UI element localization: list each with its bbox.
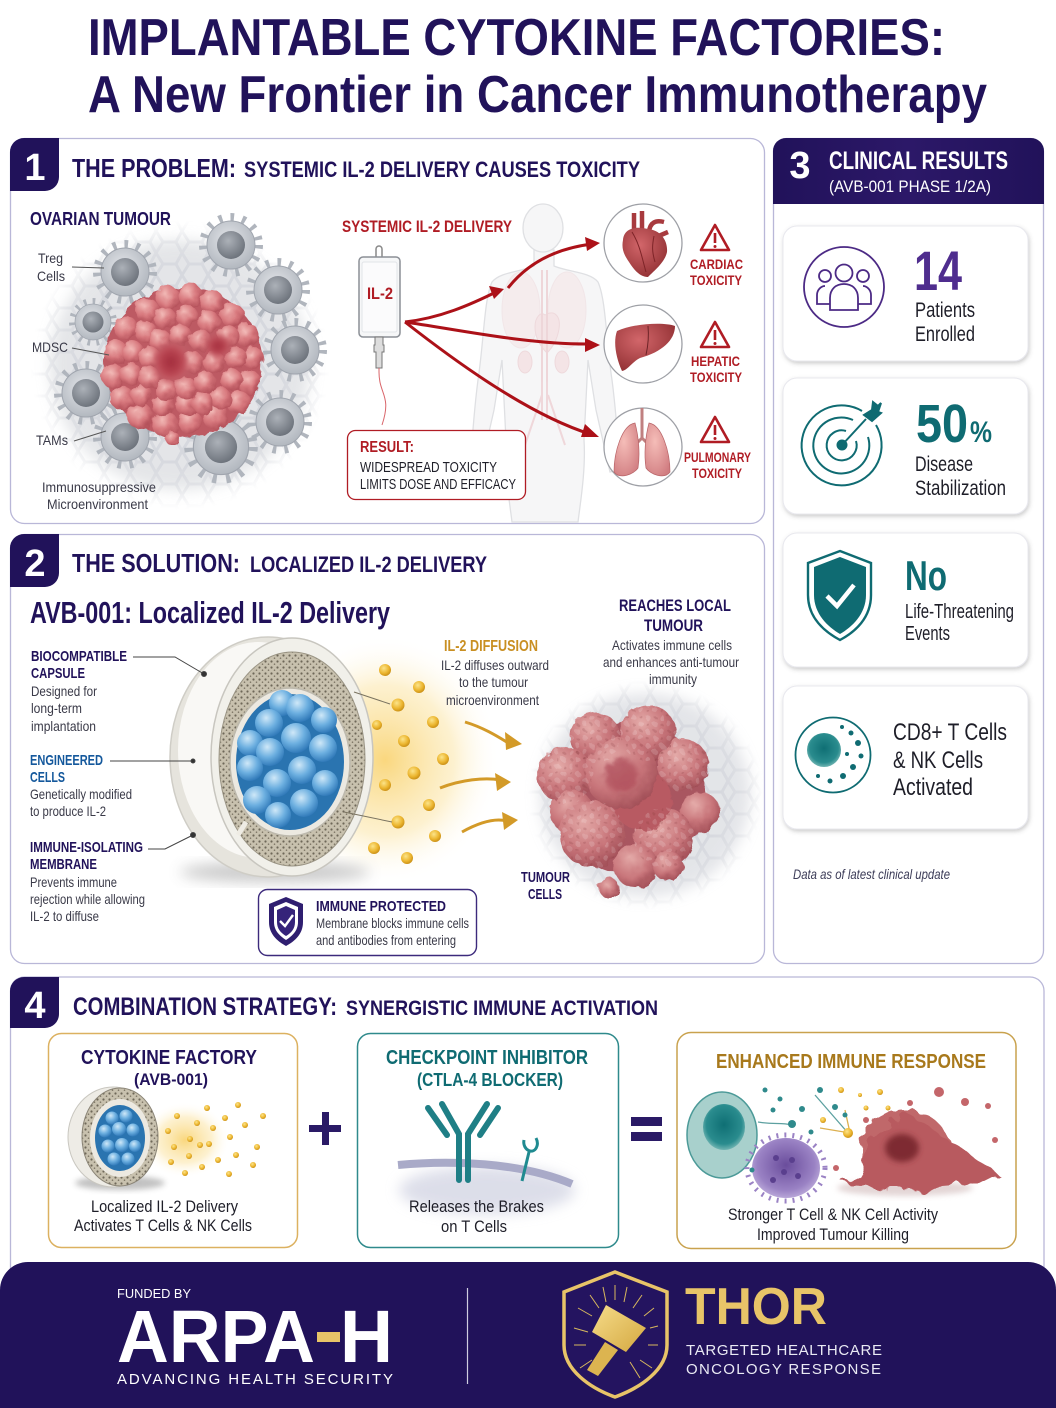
capsule callouts: CAPSULE [31, 665, 85, 682]
purple NK cell [747, 1135, 825, 1201]
THOR wordmark: TARGETED HEALTHCARE [686, 1342, 882, 1359]
result callout: LIMITS DOSE AND EFFICACY [360, 477, 516, 493]
icon: IV bag: IL-2 [367, 284, 393, 303]
heading: combination: COMBINATION STRATEGY: [73, 993, 337, 1021]
card: no life-threatening events: No [905, 552, 947, 599]
box: cytokine factory: (AVB-001) [134, 1070, 208, 1089]
reaches tumour text: TUMOUR [644, 616, 703, 635]
diffusion text: IL-2 DIFFUSION [444, 638, 538, 655]
toxicity warnings: HEPATIC [691, 353, 740, 369]
human body silhouette [470, 204, 620, 522]
reaches tumour text: Activates immune cells [612, 637, 732, 653]
badge 2 [10, 534, 59, 587]
immune protected callout: Membrane blocks immune cells [316, 915, 469, 931]
capsule callouts: MEMBRANE [30, 856, 97, 873]
tumour cells label: TUMOUR [521, 869, 570, 886]
heading: the problem: SYSTEMIC IL-2 DELIVERY CAUSES TOXICITY [244, 157, 640, 182]
heading: combination [73, 993, 658, 1021]
capsule callouts: rejection while allowing [30, 891, 145, 907]
badge 1 [10, 138, 59, 191]
capsule callouts [30, 648, 145, 924]
header: 3 [789, 145, 811, 187]
capsule callouts: long-term [31, 700, 82, 716]
box: enhanced immune response: ENHANCED IMMUNE RESPONSE [716, 1051, 986, 1073]
funder logo: ARPA-H [117, 1286, 393, 1388]
immune protected callout [258, 890, 476, 956]
card: patients [783, 226, 1028, 361]
teal T cell [687, 1092, 757, 1178]
header [773, 138, 1044, 204]
toxicity warnings: CARDIAC [690, 256, 743, 272]
card: immune activation: & NK Cells [893, 747, 983, 774]
tumour cells label [521, 869, 570, 903]
capsule callouts: implantation [31, 718, 96, 734]
card: disease stabilization: % [970, 416, 992, 449]
subheading: AVB-001: Localized IL-2 Delivery [30, 595, 391, 630]
mini capsule [68, 1087, 266, 1190]
funder logo: ARPA-H: H [340, 1295, 393, 1378]
title: IMPLANTABLE CYTOKINE FACTORIES: [88, 9, 945, 67]
capsule illustration [170, 637, 392, 882]
box: checkpoint inhibitor [358, 1034, 618, 1248]
card: immune activation [783, 686, 1028, 829]
capsule callouts: to produce IL-2 [30, 803, 106, 819]
heading: the solution [72, 548, 487, 578]
heading: combination: SYNERGISTIC IMMUNE ACTIVATION [346, 997, 658, 1020]
card: disease stabilization [783, 378, 1028, 514]
icon: THOR shield with hammer [564, 1272, 667, 1397]
arrows: systemic spread [405, 237, 600, 437]
card: patients: 14 [914, 239, 962, 302]
card: immune activation: CD8+ T Cells [893, 719, 1007, 746]
tumour being killed [833, 1087, 998, 1196]
organ: liver [604, 305, 682, 383]
icon: small receptor [522, 1138, 537, 1181]
result callout: RESULT: [360, 439, 414, 456]
cell membrane [398, 1163, 575, 1214]
box: cytokine factory: Localized IL-2 Delivery [91, 1197, 238, 1216]
panel 3: clinical results [773, 138, 1044, 964]
tumour cells label: CELLS [528, 886, 562, 903]
panel 2: the solution [10, 534, 764, 964]
organ: heart [604, 204, 682, 282]
reaches tumour text: REACHES LOCAL [619, 596, 731, 615]
capsule callouts: Genetically modified [30, 786, 132, 802]
heading: the problem: THE PROBLEM: [72, 153, 236, 183]
box: cytokine factory: CYTOKINE FACTORY [81, 1047, 258, 1069]
signal particles [750, 1087, 890, 1172]
header: (AVB-001 PHASE 1/2A) [829, 177, 991, 196]
card: no life-threatening events: Events [905, 623, 950, 645]
toxicity warnings: TOXICITY [690, 369, 743, 385]
toxicity warnings [684, 225, 751, 481]
THOR wordmark: ONCOLOGY RESPONSE [686, 1361, 881, 1378]
tumour cell labels: Immunosuppressive [42, 479, 156, 495]
label: systemic delivery: SYSTEMIC IL-2 DELIVERY [342, 217, 513, 236]
ovarian tumour illustration [30, 218, 330, 510]
box: checkpoint inhibitor: CHECKPOINT INHIBITOR [386, 1047, 588, 1069]
tumour cell labels: Treg [38, 250, 63, 266]
equals sign [631, 1117, 662, 1141]
icon: activated cell [796, 718, 870, 792]
badge 4: 4 [24, 985, 46, 1027]
diffusion text: to the tumour [459, 674, 528, 690]
box: cytokine factory [48, 1034, 298, 1248]
capsule callouts: ENGINEERED [30, 752, 103, 769]
icon: antibody [428, 1104, 498, 1180]
result callout [348, 430, 526, 500]
capsule callouts: CELLS [30, 769, 65, 786]
THOR wordmark [685, 1278, 882, 1378]
box: enhanced immune response: Improved Tumour Killing [757, 1225, 909, 1244]
tumour cell labels: TAMs [36, 432, 68, 448]
icon: people [804, 247, 884, 327]
panel 4: combination strategy [10, 977, 1044, 1280]
diffusion text [441, 638, 549, 708]
capsule callouts: Prevents immune [30, 874, 117, 890]
heading: the solution: THE SOLUTION: [72, 548, 240, 578]
immune protected callout: IMMUNE PROTECTED [316, 898, 446, 915]
funder logo: ARPA-H: ADVANCING HEALTH SECURITY [117, 1371, 393, 1388]
organ: lungs [604, 408, 682, 486]
tumour cell labels [32, 250, 156, 512]
ovarian tumour label: OVARIAN TUMOUR [30, 209, 171, 229]
footnote: Data as of latest clinical update [793, 866, 950, 882]
reaches tumour text: and enhances anti-tumour [603, 654, 739, 670]
tumour illustration [527, 680, 763, 910]
capsule callouts: IL-2 to diffuse [30, 908, 99, 924]
box: cytokine factory: Activates T Cells & NK Cells [74, 1216, 252, 1235]
tumour cell labels: MDSC [32, 339, 68, 355]
card: immune activation: Activated [893, 774, 973, 801]
card: disease stabilization: Disease [915, 453, 973, 476]
badge 4 [10, 977, 59, 1028]
IL-2 glow and diffusing dots [270, 635, 500, 885]
immune protected callout: and antibodies from entering [316, 932, 456, 948]
capsule callouts: Designed for [31, 683, 97, 699]
arrows: gold diffusion [440, 722, 522, 832]
tumour cell labels: Microenvironment [47, 496, 148, 512]
funder logo: ARPA-H: FUNDED BY [117, 1286, 191, 1301]
heading: the problem [72, 153, 640, 183]
badge 2: 2 [24, 543, 46, 585]
diffusion text: IL-2 diffuses outward [441, 657, 549, 673]
card: patients: Patients [915, 299, 975, 322]
heading: the solution: LOCALIZED IL-2 DELIVERY [250, 552, 487, 577]
capsule callouts: BIOCOMPATIBLE [31, 648, 127, 665]
box: enhanced immune response: Stronger T Cell & NK Cell Activity [728, 1205, 938, 1224]
icon: shield check [808, 551, 871, 640]
reaches tumour text: immunity [649, 671, 697, 687]
panel 1: the problem [10, 138, 764, 524]
card: disease stabilization: Stabilization [915, 477, 1006, 500]
capsule callouts: IMMUNE-ISOLATING [30, 839, 143, 856]
diffusion text: microenvironment [446, 692, 539, 708]
toxicity warnings: TOXICITY [690, 272, 743, 288]
icon: shield [269, 897, 303, 946]
title [88, 9, 987, 124]
tumour cell labels: Cells [37, 268, 65, 284]
reaches tumour text [603, 596, 739, 687]
THOR wordmark: THOR [685, 1278, 827, 1336]
box: checkpoint inhibitor: Releases the Brakes [409, 1197, 544, 1216]
plus sign [309, 1112, 341, 1145]
card: no life-threatening events [783, 533, 1028, 667]
icon: IV bag [359, 246, 400, 425]
box: checkpoint inhibitor: on T Cells [441, 1217, 507, 1236]
toxicity warnings: PULMONARY [684, 449, 751, 465]
result callout: WIDESPREAD TOXICITY [360, 460, 497, 476]
card: disease stabilization: 50 [916, 394, 968, 454]
badge 1: 1 [24, 147, 46, 189]
footer banner [0, 1262, 1056, 1408]
box: enhanced immune response [677, 1032, 1016, 1248]
box: checkpoint inhibitor: (CTLA-4 BLOCKER) [417, 1070, 563, 1090]
funder logo: ARPA-H: ARPA [117, 1295, 315, 1378]
callout leader lines [110, 657, 206, 849]
icon: target [802, 402, 882, 485]
card: patients: Enrolled [915, 323, 975, 346]
toxicity warnings: TOXICITY [692, 465, 743, 481]
card: no life-threatening events: Life-Threatening [905, 601, 1014, 623]
